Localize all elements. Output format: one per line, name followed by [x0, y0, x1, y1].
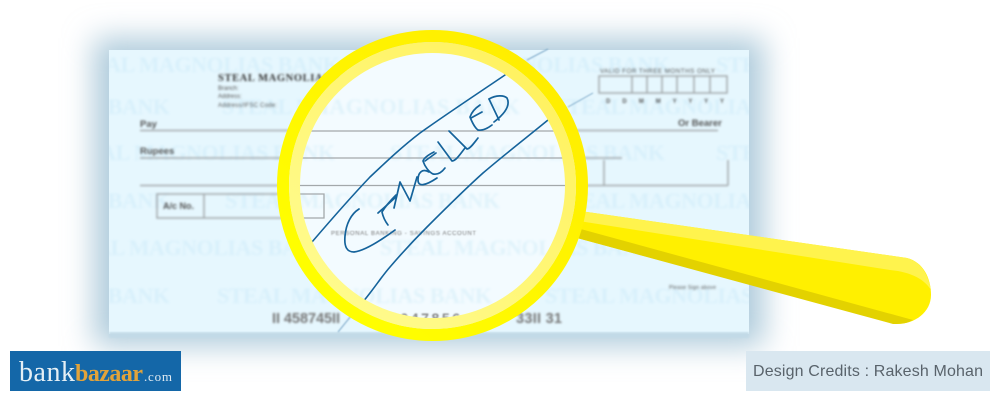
- lens watermark: [300, 100, 561, 303]
- inner pale ring: [294, 48, 570, 324]
- watermark: repeated bank name: STEAL MAGNOLIAS BANK: [380, 235, 655, 260]
- cheque form text and lines: Or Bearer: [678, 118, 722, 129]
- watermark: repeated bank name: STEAL MAGNOLIAS BANK: [545, 283, 820, 308]
- design credits: Design Credits : Rakesh Mohan: [753, 363, 983, 380]
- cheque form text and lines: Rupees: [140, 146, 174, 157]
- cheque form text and lines: 33II 31: [516, 311, 562, 327]
- logo word: .com: .com: [144, 369, 172, 384]
- lens watermark: STEAL MAGNOLIAS BANK: [390, 140, 665, 165]
- account type text: PERSONAL BANKING - SAVINGS ACCOUNT: [331, 231, 476, 237]
- cheque form text and lines: STEAL MAGNOLIAS BANK: [218, 73, 366, 84]
- cheque form text and lines: II 458745II: [272, 311, 340, 327]
- watermark: repeated bank name: STEAL MAGNOLIAS BANK: [395, 52, 670, 77]
- design credits: [746, 351, 990, 391]
- lens watermark: STEAL MAGNOLIAS BANK: [60, 140, 335, 165]
- logo word: bank: bank: [19, 357, 75, 388]
- logo: bankbazaar.com: [10, 351, 181, 391]
- cheque form text and lines: D D M M Y Y Y Y: [606, 99, 724, 105]
- lens watermark: STEAL MAGNOLIAS BANK: [230, 94, 520, 119]
- lens watermark: STEAL MAGNOLIAS BANK: [380, 235, 655, 260]
- cheque form text and lines: A/c No.: [163, 201, 194, 211]
- cheque form text and lines: [140, 68, 728, 327]
- watermark: repeated bank name: STEAL MAGNOLIAS BANK: [222, 94, 497, 119]
- cheque form text and lines: Please Sign above: [669, 285, 716, 291]
- watermark: repeated bank name: STEAL MAGNOLIAS BANK: [716, 140, 991, 165]
- watermark: repeated bank name: [109, 58, 749, 302]
- cheque form text and lines: Address/IFSC Code:: [218, 103, 277, 109]
- watermark: repeated bank name: STEAL MAGNOLIAS BANK: [555, 188, 830, 213]
- panel: blurred cheque: [109, 48, 749, 334]
- magnifying glass handle: [577, 211, 931, 324]
- cheque drop shadow: [94, 38, 764, 346]
- lens form lines: [300, 130, 565, 219]
- watermark: repeated bank name: STEAL MAGNOLIAS BANK: [390, 140, 665, 165]
- cheque form text and lines: Address:: [218, 94, 242, 100]
- watermark: repeated bank name: STEAL MAGNOLIAS BANK: [555, 94, 830, 119]
- watermark: repeated bank name: STEAL MAGNOLIAS BANK: [55, 235, 330, 260]
- handle highlight: [579, 211, 931, 290]
- cheque form text and lines: VALID FOR THREE MONTHS ONLY: [600, 68, 716, 75]
- lens view of cheque: [300, 53, 565, 318]
- cheque form text and lines: Pay: [140, 119, 158, 130]
- watermark: repeated bank name: STEAL MAGNOLIAS BANK: [217, 283, 492, 308]
- cheque number in lens: 0047856: [390, 310, 460, 326]
- watermark: repeated bank name: STEAL MAGNOLIAS BANK: [225, 188, 500, 213]
- handle shade: [577, 228, 913, 324]
- lens watermark: STEAL MAGNOLIAS BANK: [217, 283, 492, 308]
- logo word: bazaar: bazaar: [75, 361, 143, 387]
- cheque form text and lines: Branch:: [218, 86, 239, 92]
- watermark: repeated bank name: STEAL MAGNOLIAS BANK: [716, 52, 991, 77]
- watermark: repeated bank name: STEAL MAGNOLIAS BANK: [65, 52, 340, 77]
- faint pen lines outside lens: [338, 49, 593, 332]
- watermark: repeated bank name: STEAL MAGNOLIAS BANK: [60, 140, 335, 165]
- lens watermark: STEAL MAGNOLIAS BANK: [225, 188, 500, 213]
- handwritten cancelled mark: [312, 74, 548, 300]
- magnifying glass ring: [283, 36, 582, 335]
